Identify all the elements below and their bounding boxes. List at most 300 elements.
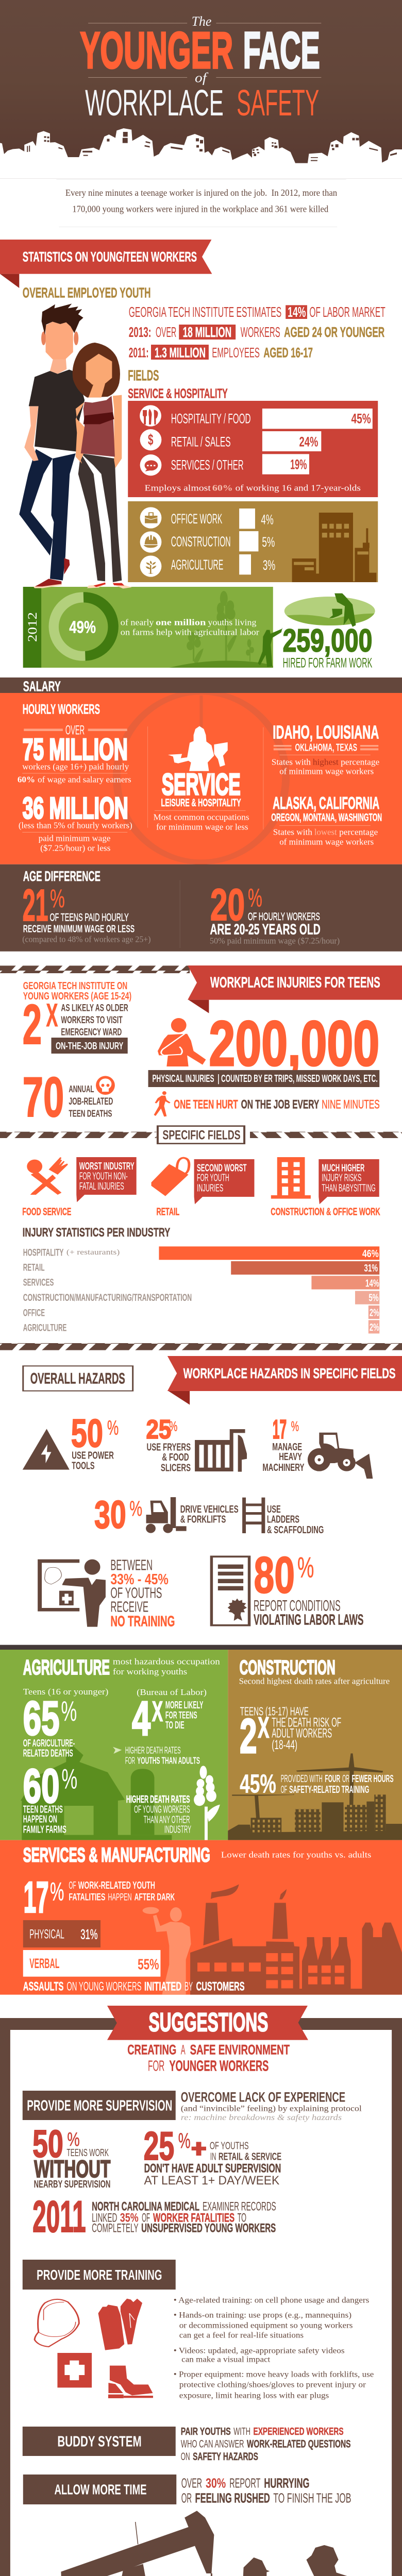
callout: food service xyxy=(22,1157,137,1217)
section: salary details: 75 MILLION xyxy=(23,733,128,766)
stat: 2x death risk xyxy=(240,1705,341,1763)
stat: hourly workers column: (less than 5% of hourly workers) xyxy=(19,820,132,830)
stat lines: employment figures: OVER xyxy=(156,325,176,340)
panel: age difference xyxy=(0,865,402,952)
caption: assaults by customers: INITIATED xyxy=(144,1979,181,1993)
panel: agriculture: % xyxy=(61,1695,77,1727)
text: one million youths on farms: of nearly xyxy=(121,617,154,627)
icon: dollar xyxy=(140,429,161,450)
icon: price tag xyxy=(151,1158,189,1196)
section: supervision and training: WITHOUT xyxy=(34,2155,110,2182)
bar: construction 5% xyxy=(171,531,275,551)
panel: agriculture: OF AGRICULTURE- xyxy=(23,1738,75,1749)
stat: 50 percent without supervision: % xyxy=(67,2128,80,2150)
stat: one teen hurt every nine minutes xyxy=(154,1091,380,1116)
icon: first aid box xyxy=(57,2353,92,2387)
stat: service leisure hospitality xyxy=(153,768,249,832)
stat: service leisure hospitality: Most common occupations xyxy=(153,812,249,822)
panel: service and hospitality bars: 19% xyxy=(290,457,307,472)
list: training tips: exposure, limit hearing loss with ear plugs xyxy=(179,2391,329,2400)
list: training tips: can get a feel for real-life situations xyxy=(179,2331,304,2340)
section: buddy system and time xyxy=(10,2425,371,2576)
panel: agriculture: AGRICULTURE xyxy=(23,1655,110,1679)
stat: 17 percent heavy machinery: MANAGE xyxy=(272,1440,302,1453)
section: overall hazards: NO TRAINING xyxy=(110,1613,175,1630)
box: provide more supervision xyxy=(23,2091,176,2120)
stat: twice as likely: X xyxy=(46,997,58,1033)
stat: hourly workers column: ($7.25/hour) or less xyxy=(40,843,110,853)
stat: 17 percent heavy machinery: % xyxy=(291,1419,299,1434)
bar: hospitality food 45%: HOSPITALITY / FOOD xyxy=(171,411,251,427)
icon: skull xyxy=(96,1076,115,1095)
stat: 17 percent heavy machinery xyxy=(262,1415,373,1479)
icon: food slicer xyxy=(195,1429,247,1472)
stat: 65 percent xyxy=(23,1691,77,1759)
stat: lowest percentage states: percentage xyxy=(339,827,378,837)
stat: 60 percent family farms: TEEN DEATHS xyxy=(23,1804,63,1815)
section: workplace injuries: JOB-RELATED xyxy=(69,1096,113,1107)
section: supervision and training: RETAIL & SERVICE xyxy=(219,2150,281,2162)
subheading: creating a safe environment: YOUNGER WORKERS xyxy=(169,2057,269,2074)
section: workplace injuries: AS LIKELY AS OLDER xyxy=(61,1003,128,1013)
icon: spoon and fork xyxy=(27,1157,68,1195)
stat: 50 percent without supervision xyxy=(32,2123,110,2190)
section: workplace injuries: SECOND WORST xyxy=(197,1162,247,1174)
stat: service leisure hospitality: for minimum wage or less xyxy=(156,822,248,832)
icon: dollar: $ xyxy=(148,431,154,448)
panel: agriculture: HIGHER DEATH RATES xyxy=(126,1794,190,1805)
stat: 45 percent training: OF xyxy=(281,1784,287,1795)
icon: waitress silhouette xyxy=(168,726,228,771)
text: over 30 percent report hurrying: OR xyxy=(181,2490,192,2505)
skyline silhouette xyxy=(0,128,402,179)
text: pair youths with experienced workers: WITH xyxy=(233,2425,250,2437)
stat: 25 percent fryers and slicers xyxy=(146,1415,247,1473)
stat: 2x death risk: (18-44) xyxy=(272,1737,297,1752)
donut: 49 percent xyxy=(49,592,119,661)
intro text xyxy=(65,188,337,214)
box: specific fields: SPECIFIC FIELDS xyxy=(162,1128,241,1142)
stat: 21 percent: 21 xyxy=(23,880,48,930)
bar: agriculture 3% xyxy=(171,554,275,574)
box: overall hazards xyxy=(23,1366,133,1391)
box: verbal 55 percent: VERBAL xyxy=(29,1956,59,1971)
stat: twice as likely: WORKERS TO VISIT xyxy=(61,1014,123,1026)
section: supervision and training: TEENS WORK xyxy=(66,2147,109,2159)
callout: retail: RETAIL xyxy=(156,1206,179,1217)
panel: office construction agriculture: 5% xyxy=(262,534,275,550)
stat: youths receive no training: 33% - 45% xyxy=(110,1571,169,1587)
section: salary details: SERVICE xyxy=(162,768,241,801)
subheading: creating a safe environment xyxy=(127,2042,290,2074)
stat: 2011 North Carolina: 35% xyxy=(120,2211,139,2225)
stat lines: employment figures: 14% xyxy=(288,304,306,320)
stat: 4x more likely xyxy=(132,1692,204,1745)
section: assaults and suggestions: CUSTOMERS xyxy=(196,1979,245,1993)
stat: 2011 North Carolina: OF xyxy=(142,2211,150,2225)
stat: 65 percent: 65 xyxy=(23,1691,59,1745)
section: statistics on young workers xyxy=(0,240,386,497)
bar: agriculture 2% xyxy=(23,1320,379,1333)
caption: 60 percent of working teens xyxy=(145,483,361,493)
stat: 30 percent vehicles and ladders: USE xyxy=(267,1504,281,1515)
stat: highest percentage states: States with xyxy=(272,757,311,767)
stat: 60 percent family farms xyxy=(23,1759,77,1835)
stat: 4x more likely: 4 xyxy=(132,1692,150,1745)
stat lines: employment figures: 1.3 MILLION xyxy=(155,345,206,361)
panel: agriculture: FAMILY FARMS xyxy=(23,1824,66,1835)
stat: 30 percent vehicles and ladders: LADDERS xyxy=(267,1514,299,1525)
section: injury statistics per industry: 31% xyxy=(364,1263,378,1274)
text: pair youths with experienced workers: ON xyxy=(181,2450,190,2463)
section: specific field hazards xyxy=(0,1650,402,1995)
icon: work boot xyxy=(108,2366,153,2398)
section: specific field hazards: AFTER DARK xyxy=(135,1892,175,1903)
caption: 60 percent of working teens: Employs almost xyxy=(145,483,211,493)
stat: 17 percent after dark xyxy=(24,1873,175,1922)
stat: youths receive no training: RECEIVE xyxy=(110,1599,148,1615)
panel: agriculture: for working youths xyxy=(113,1667,187,1676)
caption: assaults by customers: BY xyxy=(185,1979,193,1993)
bar: services other 19%: SERVICES / OTHER xyxy=(171,457,244,473)
bar: hospitality 46% xyxy=(23,1246,379,1260)
icon: high voltage triangle xyxy=(23,1429,70,1470)
stat: 2011 North Carolina: NORTH CAROLINA MEDICAL xyxy=(92,2199,199,2213)
ribbon: suggestions heading xyxy=(107,2006,308,2040)
callout: food service: FOOD SERVICE xyxy=(22,1206,71,1217)
section: statistics on young workers: FIELDS xyxy=(128,367,159,384)
section: injury statistics per industry xyxy=(0,1226,402,1405)
section: assaults and suggestions: PROVIDE MORE SUPERVISION xyxy=(27,2097,172,2114)
stat: 30 percent vehicles and ladders: 30 xyxy=(94,1493,126,1537)
panel: office construction agriculture xyxy=(128,501,378,582)
illustration: farmer watering xyxy=(284,594,375,627)
section: injury statistics per industry: 5% xyxy=(368,1292,379,1303)
panel: services and manufacturing background xyxy=(0,1840,402,1995)
icon: briefcase xyxy=(140,507,161,529)
text: pair youths with experienced workers: WHO CAN ANSWER xyxy=(181,2437,244,2450)
section: salary details: 36 MILLION xyxy=(23,791,128,825)
stat: 80 percent labor law violations: 80 xyxy=(254,1546,295,1604)
illustration: pumpjack silhouette xyxy=(10,2511,233,2576)
box: allow more time xyxy=(23,2475,176,2504)
stat: 2011 North Carolina: WORKER FATALITIES xyxy=(153,2211,234,2225)
stat: 50 percent power tools: TOOLS xyxy=(72,1460,95,1471)
stat: higher death rates for youths: FOR xyxy=(125,1756,135,1766)
stat: 45 percent training: FOUR xyxy=(325,1773,340,1785)
stat: 50 percent power tools: 50 xyxy=(71,1411,103,1455)
panel: agriculture: % xyxy=(61,1763,77,1794)
box: buddy system: BUDDY SYSTEM xyxy=(57,2433,142,2450)
bar: agriculture 3%: AGRICULTURE xyxy=(171,557,223,573)
illustration: hill and farmer xyxy=(169,628,282,668)
stat: 45 percent training: 45% xyxy=(240,1769,276,1798)
stat: hourly workers column: of wage and salary earners xyxy=(38,774,131,784)
text: overcome lack of experience: re: machine breakdowns & safety hazards xyxy=(181,2113,342,2122)
subheading: creating a safe environment: CREATING xyxy=(127,2042,176,2058)
section: workplace injuries: FOR YOUTH NON- xyxy=(79,1171,128,1182)
ribbon: workplace injuries heading xyxy=(188,965,402,1013)
stat: 2011 North Carolina: TO xyxy=(238,2211,246,2225)
stat: 30 percent vehicles and ladders: DRIVE VEHICLES xyxy=(180,1504,239,1515)
text: over 30 percent report hurrying xyxy=(181,2476,351,2505)
icon: certificate document xyxy=(211,1556,249,1625)
box: buddy system xyxy=(23,2427,176,2456)
stat: highest percentage states: highest xyxy=(313,757,339,767)
panel: agriculture: Teens (16 or younger) xyxy=(23,1687,108,1697)
stat: 25 percent plus no adult supervision xyxy=(144,2124,281,2188)
stat: hourly workers column: 60% xyxy=(18,774,35,784)
stat: 25 percent fryers and slicers: 25 xyxy=(146,1415,171,1444)
bar: services 14% xyxy=(23,1276,379,1290)
illustration: construction site silhouette xyxy=(228,1753,402,1840)
stat: 60 percent family farms: 60 xyxy=(23,1759,59,1812)
figure: young man xyxy=(19,303,85,588)
section: workplace injuries: GEORGIA TECH INSTITUTE ON xyxy=(23,979,127,992)
stat: lowest percentage states xyxy=(271,793,382,846)
stat: hourly workers column xyxy=(18,723,132,853)
stat: 2011 North Carolina: COMPLETELY xyxy=(92,2221,139,2235)
text: one million youths on farms: youths living xyxy=(208,617,257,627)
stat: 2011 North Carolina: LINKED xyxy=(92,2211,117,2225)
ribbon: statistics heading xyxy=(0,240,212,288)
stat: 259,000 hired for farm work xyxy=(283,622,372,671)
text: over 30 percent report hurrying: OVER xyxy=(181,2476,202,2490)
box: physical 31 percent xyxy=(23,1920,100,1947)
icon: plant xyxy=(140,555,161,577)
list: training tips: can make a visual impact xyxy=(181,2355,271,2364)
stat: 25 percent plus no adult supervision: IN xyxy=(210,2150,216,2162)
panel: suggestions frame xyxy=(0,2018,402,2576)
icon: trainer at board xyxy=(38,1560,106,1627)
icon: wheat stalk xyxy=(194,1766,220,1840)
stat lines: employment figures: EMPLOYEES xyxy=(212,345,260,361)
section: workplace injuries: YOUNG WORKERS (AGE 15-24) xyxy=(23,990,131,1002)
illustration: worker silhouette xyxy=(143,1907,191,1995)
text: over 30 percent report hurrying: REPORT xyxy=(229,2476,260,2490)
panel: office construction agriculture: 4% xyxy=(261,512,274,528)
panel: age difference: RECEIVE MINIMUM WAGE OR LESS xyxy=(23,923,135,935)
callout: retail: INJURIES xyxy=(197,1182,223,1194)
stat: 4x more likely: X xyxy=(152,1696,163,1727)
box: physical 31 percent: PHYSICAL xyxy=(29,1927,64,1941)
illustration: worker silhouette two xyxy=(306,2545,371,2576)
icon: hard hat xyxy=(140,531,161,553)
bar: retail sales 24%: 24% xyxy=(299,434,318,450)
panel: agriculture: HIGHER DEATH RATES xyxy=(125,1745,181,1755)
stat: lowest percentage states: lowest xyxy=(314,827,337,837)
section: injury statistics per industry: 2% xyxy=(370,1322,379,1333)
text: overcome lack of experience xyxy=(181,2090,362,2122)
stat: 2011 North Carolina xyxy=(32,2192,276,2242)
panel: agriculture: INDUSTRY xyxy=(164,1824,191,1835)
stat lines: employment figures: 2013: xyxy=(129,325,151,340)
icon: cutlery xyxy=(140,405,161,427)
panel: agriculture: MORE LIKELY xyxy=(165,1700,204,1711)
stat lines: employment figures xyxy=(129,304,386,361)
stat: twice as likely xyxy=(23,979,131,1056)
stat: 17 percent heavy machinery: HEAVY xyxy=(279,1450,302,1463)
stat lines: employment figures: AGED 16-17 xyxy=(263,345,313,361)
ribbon: workplace hazards heading xyxy=(167,1356,402,1405)
subheading: creating a safe environment: A xyxy=(181,2042,186,2058)
panel: agriculture xyxy=(0,1650,228,1840)
stat: 25 percent fryers and slicers: USE FRYERS xyxy=(147,1441,191,1453)
section: injury statistics per industry: INJURY STATISTICS PER INDUSTRY xyxy=(23,1226,170,1240)
icon: building xyxy=(271,1157,311,1199)
stat: 25 percent fryers and slicers: SLICERS xyxy=(161,1462,191,1473)
bar: services other 19% xyxy=(171,454,309,474)
bar: hospitality 46%: 46% xyxy=(362,1248,379,1260)
header panel xyxy=(0,0,402,227)
section: fields continued: HOURLY WORKERS xyxy=(23,702,100,717)
heading: salary: SALARY xyxy=(23,678,61,694)
caption: 60 percent of working teens: 60% xyxy=(212,483,233,493)
bar: services 14%: SERVICES xyxy=(23,1277,54,1288)
section: workplace injuries: WORST INDUSTRY xyxy=(79,1161,135,1172)
bar: retail 31%: RETAIL xyxy=(23,1262,45,1273)
text: over 30 percent report hurrying: FEELING RUSHED xyxy=(195,2490,270,2505)
stat: 25 percent fryers and slicers: & FOOD xyxy=(162,1451,189,1463)
icon: gloves xyxy=(98,2299,142,2350)
stat: 45 percent training xyxy=(240,1769,394,1798)
panel: agriculture 2012 xyxy=(23,587,282,668)
stat: 25 percent plus no adult supervision: OF YOUTHS xyxy=(210,2140,249,2151)
section: workplace injuries xyxy=(0,965,402,1217)
text: over 30 percent report hurrying: HURRYING xyxy=(264,2476,309,2490)
panel: agriculture: RELATED DEATHS xyxy=(23,1748,73,1759)
panel: agriculture: FOR TEENS xyxy=(165,1710,197,1721)
title: The xyxy=(192,14,211,29)
stat: 21 percent: % xyxy=(50,885,65,913)
stat: twice as likely: 2 xyxy=(23,993,42,1056)
section: workplace injuries: TEEN DEATHS xyxy=(69,1109,112,1119)
illustration: young couple xyxy=(19,303,132,588)
stat: 50 percent power tools xyxy=(23,1411,119,1471)
section: workplace injuries: EMERGENCY WARD xyxy=(61,1027,122,1038)
section: overall hazards: % xyxy=(107,1416,119,1439)
subheading: creating a safe environment: FOR xyxy=(148,2057,164,2074)
icon: ladder xyxy=(242,1498,265,1533)
bar: agriculture 2%: AGRICULTURE xyxy=(23,1323,66,1333)
bar: office 2% xyxy=(23,1306,379,1319)
bar: office 2%: OFFICE xyxy=(23,1308,45,1318)
stat: youths receive no training: BETWEEN xyxy=(110,1557,153,1573)
panel: office construction agriculture: 3% xyxy=(263,557,275,573)
stat: 25 percent plus no adult supervision: 25 xyxy=(144,2124,174,2168)
bar: office work 4% xyxy=(171,509,274,529)
box: provide more training xyxy=(23,2260,176,2290)
text: one million youths on farms: one million xyxy=(156,617,206,627)
section: salary details xyxy=(0,721,402,952)
stat: hourly workers column: workers (age 16+) paid hourly xyxy=(22,761,129,771)
bar chart: injuries per industry xyxy=(23,1246,379,1333)
bar: office work 4%: OFFICE WORK xyxy=(171,511,222,527)
stat: 30 percent vehicles and ladders: % xyxy=(129,1497,142,1521)
text: pair youths with experienced workers: SAFETY HAZARDS xyxy=(193,2450,258,2463)
illustration: barn and silo xyxy=(21,1745,172,1840)
section: assaults and suggestions: SAFE ENVIRONMENT xyxy=(190,2042,290,2058)
stat lines: employment figures: 18 MILLION xyxy=(183,325,231,340)
stat: 17 percent heavy machinery: 17 xyxy=(273,1415,287,1444)
panel: agriculture: YOUTHS THAN ADULTS xyxy=(137,1756,200,1766)
section: supervision and training xyxy=(23,2123,374,2400)
box: verbal 55 percent: 55% xyxy=(138,1956,159,1973)
stat: 20 percent xyxy=(210,879,340,946)
stat: higher death rates than any industry xyxy=(126,1794,191,1835)
panel: service and hospitality bars xyxy=(128,401,378,497)
panel: agriculture: (Bureau of Labor) xyxy=(137,1687,207,1697)
stat: youths receive no training xyxy=(38,1557,175,1630)
stat: 4x more likely: TO DIE xyxy=(165,1720,185,1731)
stat lines: employment figures: WORKERS xyxy=(241,325,280,340)
stat: 25 percent plus no adult supervision: AT LEAST 1+ DAY/WEEK xyxy=(144,2174,279,2188)
stat: 17 percent after dark: HAPPEN xyxy=(108,1892,132,1903)
section: salary details: LEISURE & HOSPITALITY xyxy=(161,796,241,809)
donut: 49 percent: 49% xyxy=(69,617,96,637)
stat: 80 percent labor law violations: % xyxy=(297,1551,314,1584)
stat: 200,000 physical injuries xyxy=(148,1008,379,1087)
bar: hospitality food 45%: 45% xyxy=(351,411,371,427)
stat: 21 percent xyxy=(22,880,151,944)
panel: agriculture: THAN ANY OTHER xyxy=(144,1814,190,1825)
heading: salary xyxy=(0,677,402,694)
stat: hourly workers column: paid minimum wage xyxy=(39,834,110,843)
text: over 30 percent report hurrying: 30% xyxy=(206,2476,226,2490)
stat: 2x death risk: 2 xyxy=(240,1709,257,1763)
stat: higher death rates for youths xyxy=(113,1745,200,1766)
bar: construction 5%: CONSTRUCTION xyxy=(171,534,231,550)
box: verbal 55 percent xyxy=(23,1950,160,1977)
stat: 17 percent after dark: OF xyxy=(69,1879,76,1891)
panel: agriculture: most hazardous occupation xyxy=(113,1657,220,1667)
box: specific fields xyxy=(158,1126,244,1144)
illustration: factory silhouette xyxy=(190,1884,402,1995)
callout: retail: FOR YOUTH xyxy=(197,1172,229,1183)
illustration: worker silhouette one xyxy=(224,2557,296,2576)
text: one million youths on farms xyxy=(121,617,259,637)
stat: youths receive no training: OF YOUTHS xyxy=(110,1585,162,1601)
text: one million youths on farms: on farms help with agricultural labor xyxy=(121,628,259,637)
panel: agriculture: OF YOUNG WORKERS xyxy=(134,1804,190,1815)
section: supervision and training: EXAMINER RECORDS xyxy=(203,2199,276,2213)
stat: 30 percent vehicles and ladders xyxy=(94,1493,324,1537)
stat: 70 annual teen deaths: 70 xyxy=(23,1066,64,1129)
icon: tractor xyxy=(308,1433,373,1479)
section: overall hazards xyxy=(0,1411,402,1650)
stat: 17 percent after dark: 17 xyxy=(24,1873,49,1922)
bar: retail 31% xyxy=(23,1261,379,1275)
stat: 17 percent heavy machinery: MACHINERY xyxy=(262,1461,305,1473)
stat: lowest percentage states: States with xyxy=(273,827,312,837)
panel: salary background xyxy=(0,692,402,865)
stat: hourly workers column: OVER xyxy=(65,723,85,737)
stat: 2x death risk: X xyxy=(258,1711,269,1744)
illustration: wheat background xyxy=(187,591,254,666)
text: pair youths with experienced workers: PAIR YOUTHS xyxy=(181,2425,231,2437)
section: supervision and training: NEARBY SUPERVISION xyxy=(34,2178,110,2190)
panel: age difference: AGE DIFFERENCE xyxy=(23,868,100,884)
icon: helmet xyxy=(35,2299,79,2347)
stat: 25 percent fryers and slicers: % xyxy=(169,1419,177,1434)
section: fields continued xyxy=(0,483,402,865)
stat: highest percentage states xyxy=(272,721,379,825)
text: pair youths with experienced workers xyxy=(181,2425,351,2463)
illustration: buildings xyxy=(292,513,376,582)
stat: 21 percent: OF TEENS PAID HOURLY xyxy=(50,911,129,923)
stat: 20 percent: % xyxy=(248,884,262,912)
icon: speech bubble xyxy=(140,454,161,476)
